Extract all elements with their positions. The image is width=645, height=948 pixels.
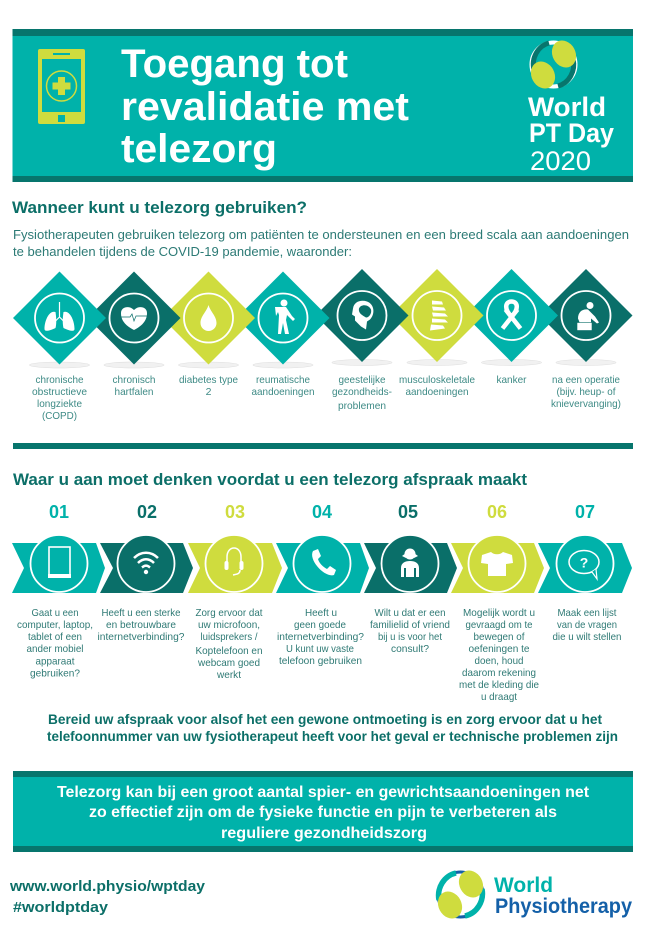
step text 6: u draagt bbox=[481, 691, 517, 703]
label: mental health: problemen bbox=[338, 400, 386, 412]
diamond: COPD bbox=[13, 272, 106, 364]
step text 5: familielid of vriend bbox=[370, 619, 450, 631]
step numbers: 02 bbox=[137, 502, 157, 522]
label: rheumatic: aandoeningen bbox=[252, 386, 315, 398]
label: mental health bbox=[332, 374, 392, 412]
step text 3: Zorg ervoor dat bbox=[196, 607, 263, 619]
preparation note bbox=[47, 711, 618, 744]
step text 2: internetverbinding? bbox=[98, 631, 185, 643]
intro paragraph bbox=[13, 227, 629, 259]
step 7: question bubble bbox=[538, 535, 632, 593]
diamond: heart failure bbox=[88, 272, 180, 364]
step text 4: Heeft u bbox=[305, 607, 337, 619]
title bbox=[121, 42, 409, 171]
step numbers: 04 bbox=[312, 502, 332, 522]
step text 1: gebruiken? bbox=[30, 668, 80, 680]
footer website and hashtag: #worldptday bbox=[13, 899, 109, 916]
step text 2: Heeft u een sterke bbox=[102, 607, 181, 619]
callout: effectiveness: reguliere gezondheidszorg bbox=[221, 825, 427, 842]
step text 3 bbox=[196, 607, 263, 681]
logo: World Physiotherapy bbox=[433, 866, 632, 923]
step text 5: Wilt u dat er een bbox=[374, 607, 446, 619]
step numbers: 01 bbox=[49, 502, 69, 522]
diamond: mental health bbox=[316, 269, 408, 362]
logo: World PT Day 2020: PT Day bbox=[529, 118, 614, 148]
step text 6: bewegen of bbox=[474, 631, 525, 643]
step text 6: gevraagd om te bbox=[466, 619, 533, 631]
label: heart failure: chronisch bbox=[112, 374, 156, 386]
step text 1: Gaat u een bbox=[32, 607, 79, 619]
step text 3: Koptelefoon en bbox=[196, 645, 263, 657]
label: COPD: longziekte bbox=[37, 398, 82, 410]
step text 6: oefeningen te bbox=[468, 643, 530, 655]
step numbers: 03 bbox=[225, 502, 245, 522]
diamond: surgery bbox=[540, 269, 632, 362]
step text 4: internetverbinding? bbox=[277, 631, 364, 643]
header banner bbox=[12, 29, 633, 182]
callout: effectiveness: Telezorg kan bij een groot aantal spier- en gewrichtsaandoeningen net bbox=[57, 784, 589, 801]
shadows under diamonds bbox=[30, 360, 616, 368]
callout: effectiveness bbox=[13, 771, 633, 852]
step text 4: U kunt uw vaste bbox=[286, 643, 354, 655]
label: musculoskeletal: musculoskeletale bbox=[399, 374, 475, 386]
label: surgery: (bijv. heup- of bbox=[556, 386, 616, 398]
step text 7 bbox=[552, 607, 622, 643]
step 2: wifi bbox=[100, 535, 193, 593]
step text 5: bij u is voor het bbox=[378, 631, 442, 643]
step 6: t-shirt bbox=[451, 535, 544, 593]
label: COPD: chronische bbox=[36, 374, 84, 386]
step text 7: die u wilt stellen bbox=[552, 631, 622, 643]
step text 6: Mogelijk wordt u bbox=[463, 607, 535, 619]
label: mental health: geestelijke bbox=[338, 374, 386, 386]
step 1: tablet bbox=[12, 535, 105, 593]
step numbers bbox=[49, 502, 595, 522]
step descriptions bbox=[17, 607, 622, 703]
step text 7: van de vragen bbox=[557, 619, 617, 631]
step numbers: 07 bbox=[575, 502, 595, 522]
step text 1: ander mobiel bbox=[26, 643, 84, 655]
step 5: family member bbox=[364, 535, 457, 593]
logo: World PT Day 2020: World bbox=[528, 92, 606, 122]
title: telezorg bbox=[121, 127, 277, 171]
label: surgery: na een operatie bbox=[552, 374, 620, 386]
panel: conditions diamonds bbox=[13, 269, 632, 364]
label: musculoskeletal: aandoeningen bbox=[406, 386, 469, 398]
label: rheumatic: reumatische bbox=[256, 374, 310, 386]
heading: what to consider: Waar u aan moet denken voordat u een telezorg afspraak maakt bbox=[13, 470, 527, 489]
step text 1: computer, laptop, bbox=[17, 619, 93, 631]
step text 4: telefoon gebruiken bbox=[279, 655, 362, 667]
diamond: rheumatic bbox=[236, 272, 330, 364]
label: COPD: obstructieve bbox=[32, 386, 87, 398]
step text 5 bbox=[370, 607, 450, 655]
preparation note: Bereid uw afspraak voor alsof het een gewone ontmoeting is en zorg ervoor dat u het bbox=[48, 711, 602, 727]
logo: World PT Day 2020: 2020 bbox=[530, 146, 591, 176]
logo: World Physiotherapy: World bbox=[494, 874, 553, 897]
footer website and hashtag bbox=[9, 878, 206, 916]
label: heart failure: hartfalen bbox=[114, 386, 154, 398]
callout: effectiveness: zo effectief zijn om de fysieke functie en pijn te verbeteren als bbox=[89, 804, 557, 821]
logo: World PT Day 2020 bbox=[526, 36, 614, 176]
step text 3: webcam goed bbox=[197, 657, 260, 669]
step text 4 bbox=[277, 607, 364, 667]
logo: World Physiotherapy: Physiotherapy bbox=[495, 895, 632, 918]
label: COPD: (COPD) bbox=[42, 410, 77, 422]
diamond: diabetes bbox=[162, 272, 255, 364]
step text 3: uw microfoon, bbox=[198, 619, 260, 631]
step text 1: apparaat bbox=[36, 656, 75, 668]
heading: when to use telehealth: Wanneer kunt u telezorg gebruiken? bbox=[12, 198, 307, 217]
preparation note: telefoonnummer van uw fysiotherapeut heeft voor het geval er technische problemen zijn bbox=[47, 728, 618, 744]
step text 6: daarom rekening bbox=[462, 667, 536, 679]
label: surgery bbox=[551, 374, 621, 410]
label: heart failure bbox=[112, 374, 156, 398]
step 4: telephone bbox=[276, 535, 369, 593]
step text 2: en betrouwbare bbox=[106, 619, 176, 631]
panel: chevron steps bbox=[12, 535, 632, 593]
step text 3: luidsprekers / bbox=[200, 631, 258, 643]
step text 3: werkt bbox=[216, 669, 241, 681]
step 3: headset bbox=[188, 535, 282, 593]
condition labels bbox=[32, 374, 621, 422]
step text 6 bbox=[459, 607, 539, 703]
step text 2 bbox=[98, 607, 185, 643]
intro paragraph: Fysiotherapeuten gebruiken telezorg om patiënten te ondersteunen en een breed scala aan aandoeningen bbox=[13, 227, 629, 242]
label: diabetes bbox=[179, 374, 238, 398]
step text 1: tablet of een bbox=[28, 631, 82, 643]
step text 1 bbox=[17, 607, 93, 680]
label: rheumatic bbox=[252, 374, 315, 398]
title: revalidatie met bbox=[121, 85, 409, 129]
footer website and hashtag: www.world.physio/wptday bbox=[9, 878, 206, 895]
step 7: question bubble: ? bbox=[580, 554, 588, 570]
step text 6: met de kleding die bbox=[459, 679, 539, 691]
icon: phone with medical cross bbox=[38, 49, 85, 124]
label: diabetes: diabetes type bbox=[179, 374, 238, 386]
step text 5: consult? bbox=[391, 643, 429, 655]
intro paragraph: te behandelen tijdens de COVID-19 pandemie, waaronder: bbox=[13, 244, 352, 259]
label: diabetes: 2 bbox=[206, 386, 212, 398]
label: surgery: knievervanging) bbox=[551, 398, 621, 410]
step text 4: geen goede bbox=[294, 619, 346, 631]
step text 6: doen, houd bbox=[474, 655, 524, 667]
diamond: cancer bbox=[465, 269, 558, 362]
step numbers: 06 bbox=[487, 502, 507, 522]
label: cancer: kanker bbox=[496, 374, 527, 386]
title: Toegang tot bbox=[121, 42, 348, 86]
label: COPD bbox=[32, 374, 87, 422]
label: mental health: gezondheids- bbox=[332, 386, 392, 398]
label: musculoskeletal bbox=[399, 374, 475, 398]
step numbers: 05 bbox=[398, 502, 418, 522]
step text 7: Maak een lijst bbox=[558, 607, 617, 619]
diamond: musculoskeletal bbox=[390, 269, 484, 362]
